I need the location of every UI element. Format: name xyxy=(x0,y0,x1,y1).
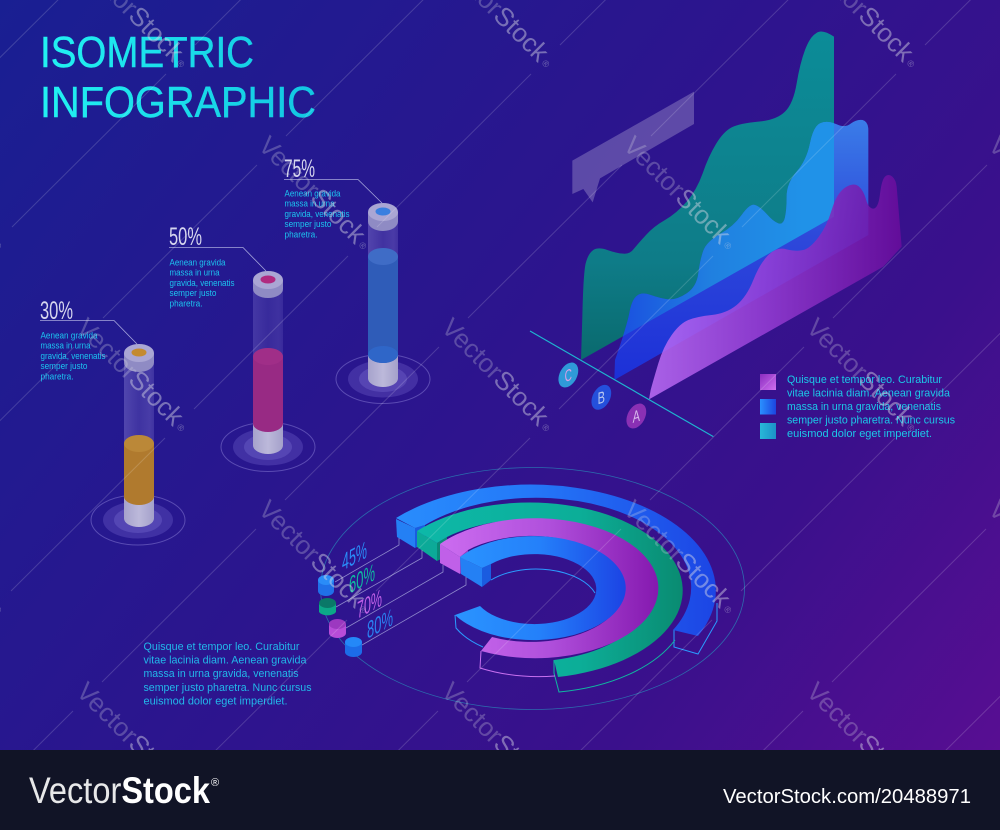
text block: radial chart: vitae lacinia diam. Aenean gravida xyxy=(144,654,307,666)
watermarks: ® xyxy=(720,238,734,252)
tube bottom xyxy=(253,424,283,454)
slanted percentages: 70% xyxy=(357,585,382,625)
registered mark: ® xyxy=(211,777,219,789)
magenta fill xyxy=(253,356,283,432)
axis badge C xyxy=(554,359,582,391)
text block: radial chart: Quisque et tempor leo. Curabitur xyxy=(144,641,300,653)
watermarks: VectorStock xyxy=(71,312,190,431)
base rings xyxy=(221,422,315,472)
text block: gravida, venenatis xyxy=(170,278,235,288)
cylinder chart: 75% xyxy=(284,155,430,404)
legend text: semper justo pharetra. Nunc cursus xyxy=(787,414,955,426)
text block xyxy=(40,330,106,381)
swatch A xyxy=(760,374,776,390)
axis badge A: A xyxy=(633,406,640,427)
watermarks: VectorStock xyxy=(436,312,555,431)
text block: Aenean gravida xyxy=(40,330,98,340)
text block: pharetra. xyxy=(284,229,318,239)
marker: 45% blue xyxy=(318,575,334,596)
glass tube xyxy=(253,290,283,435)
swatch B xyxy=(760,399,776,414)
text block: pharetra. xyxy=(40,371,74,381)
series B: blue area xyxy=(614,120,868,380)
outer orbit xyxy=(320,468,744,710)
axis badge A xyxy=(622,400,650,432)
title: ISOMETRIC xyxy=(40,28,254,77)
cap xyxy=(253,280,283,298)
series A: purple area xyxy=(649,175,902,399)
watermarks: ® xyxy=(903,420,917,434)
text block: massa in urna xyxy=(170,268,220,278)
watermarks: ® xyxy=(538,784,552,798)
marker: 80% blue xyxy=(345,637,362,657)
slanted percentages: 80% xyxy=(367,604,393,645)
label: 50%: 50% xyxy=(169,223,202,251)
watermarks: ® xyxy=(720,602,734,616)
watermarks: ® xyxy=(538,420,552,434)
speech bubble xyxy=(572,92,694,202)
text block: massa in urna xyxy=(284,199,334,209)
watermarks: VectorStock xyxy=(436,676,555,795)
marker: 60% green xyxy=(319,598,336,615)
tube bottom xyxy=(368,355,398,387)
axis line xyxy=(530,331,713,437)
legend text: euismod dolor eget imperdiet. xyxy=(787,428,932,440)
label: 75%: 75% xyxy=(284,155,315,183)
text block: Aenean gravida xyxy=(284,188,340,198)
cap xyxy=(124,353,154,372)
watermarks: ® xyxy=(538,56,552,70)
axis badge C: C xyxy=(565,365,572,386)
cylinder chart: 50% xyxy=(169,223,315,472)
leader lines xyxy=(335,538,466,645)
watermarks: VectorStock xyxy=(618,130,737,249)
title: INFOGRAPHIC xyxy=(40,78,316,127)
text block: pharetra. xyxy=(170,298,202,308)
glass tube xyxy=(368,222,398,367)
text block: gravida, venenatis xyxy=(40,351,106,361)
watermarks: VectorStock xyxy=(618,494,737,613)
glass tube xyxy=(124,362,154,507)
legend text: massa in urna gravida, venenatis xyxy=(787,401,941,413)
wall outlines xyxy=(455,569,717,692)
watermarks: ® xyxy=(355,238,369,252)
cap xyxy=(368,212,398,231)
slanted percentages xyxy=(342,537,393,645)
text block: Aenean gravida xyxy=(170,258,226,268)
watermarks: ® xyxy=(173,420,187,434)
legend: area chart xyxy=(760,374,955,440)
axis badge B xyxy=(587,381,615,413)
slanted percentages: 60% xyxy=(349,559,375,600)
axis badge B: B xyxy=(598,387,605,408)
tube bottom xyxy=(124,497,154,527)
text block: gravida, venenatis xyxy=(284,209,350,219)
base rings xyxy=(91,495,185,545)
text block: radial chart: euismod dolor eget imperdiet. xyxy=(144,696,288,708)
watermarks: ® xyxy=(903,56,917,70)
marker: 70% purple xyxy=(329,619,346,638)
slanted percentages: 45% xyxy=(342,537,367,577)
outer blue ring xyxy=(396,485,716,636)
green ring xyxy=(417,503,683,677)
leader line xyxy=(40,320,137,344)
base rings xyxy=(336,354,430,404)
cylinder chart: 30% xyxy=(40,297,185,545)
legend text: vitae lacinia diam. Aenean gravida xyxy=(787,388,951,400)
watermarks: ® xyxy=(903,784,917,798)
leader line xyxy=(284,180,382,203)
text block: semper justo xyxy=(170,288,216,298)
inner blue ring xyxy=(455,536,626,640)
text block: radial chart: semper justo pharetra. Nunc cursus xyxy=(144,682,312,694)
area chart xyxy=(530,31,902,437)
radial bar chart xyxy=(318,468,744,710)
text block xyxy=(284,188,350,239)
leader line xyxy=(169,248,266,271)
label: 30%: 30% xyxy=(40,297,73,325)
footer logo: VectorStock xyxy=(29,770,210,811)
footer url: VectorStock.com/20488971 xyxy=(723,786,971,808)
watermarks: ® xyxy=(173,56,187,70)
text block: semper justo xyxy=(40,361,88,371)
orange fill xyxy=(124,444,154,505)
text block: semper justo xyxy=(284,219,332,229)
watermarks: ® xyxy=(173,784,187,798)
footer bar xyxy=(0,750,1000,830)
watermarks: VectorStock xyxy=(253,130,372,249)
text block xyxy=(170,258,235,308)
watermarks: VectorStock xyxy=(253,494,372,613)
watermarks: VectorStock xyxy=(801,676,920,795)
blue fill xyxy=(368,256,398,363)
text block: radial chart xyxy=(144,641,312,708)
watermarks: ® xyxy=(355,602,369,616)
legend text xyxy=(787,374,955,440)
swatch C xyxy=(760,423,776,439)
text block: radial chart: massa in urna gravida, venenatis xyxy=(144,668,299,680)
legend text: Quisque et tempor leo. Curabitur xyxy=(787,374,942,386)
text block: massa in urna xyxy=(40,341,90,351)
title xyxy=(40,28,316,127)
watermarks: VectorStock xyxy=(801,312,920,431)
watermarks: VectorStock xyxy=(71,676,190,795)
series C: teal area xyxy=(581,31,834,360)
purple ring xyxy=(440,518,658,658)
